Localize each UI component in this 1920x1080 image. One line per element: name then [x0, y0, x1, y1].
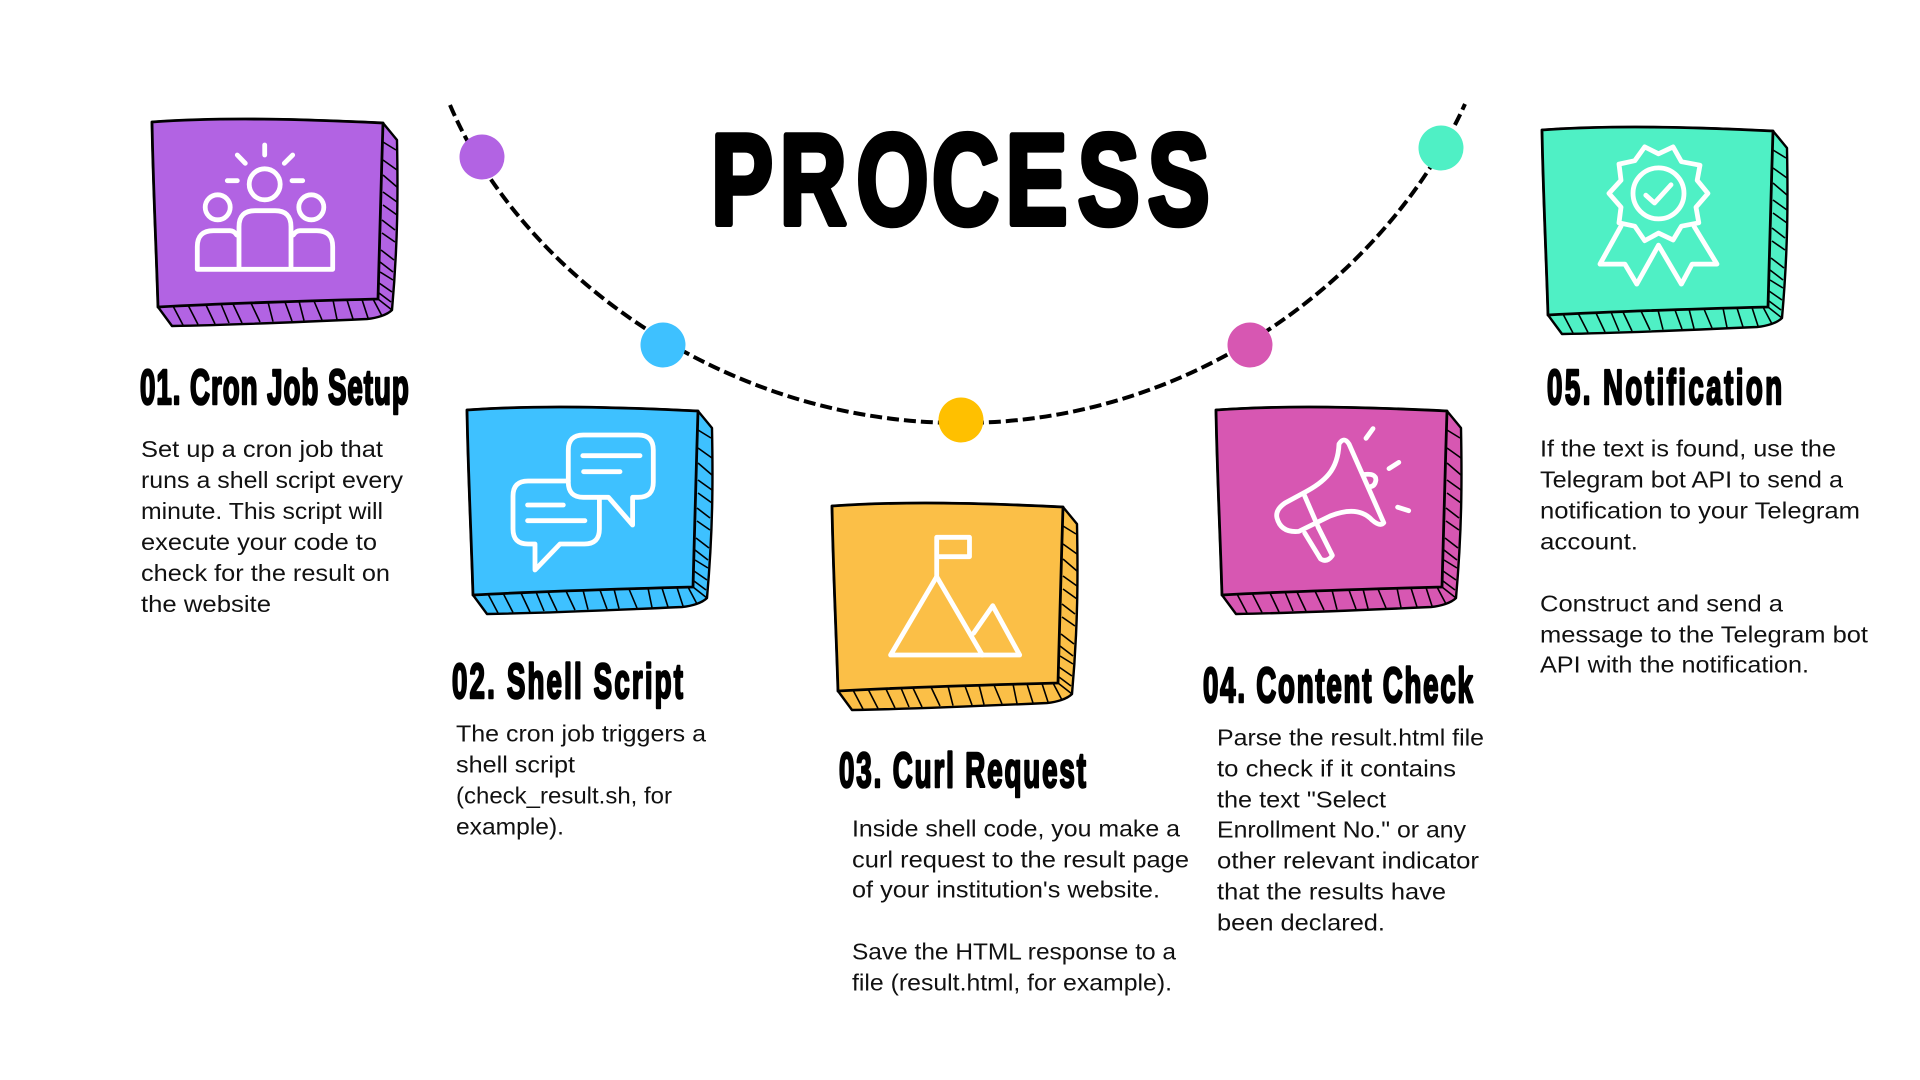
panel: step 4 content check	[1203, 407, 1484, 935]
body text: Save the HTML response to a	[852, 938, 1176, 964]
icon: award badge	[1600, 147, 1717, 284]
heading: 04. Content Check	[1203, 659, 1473, 713]
body text: been declared.	[1217, 909, 1385, 935]
body text: notification to your Telegram	[1540, 497, 1860, 523]
body text: execute your code to	[141, 529, 377, 555]
card: pink	[1216, 407, 1461, 614]
heading: 02. Shell Script	[452, 655, 683, 709]
icon: chat bubbles	[513, 435, 653, 570]
title: PROCESS	[711, 107, 1210, 252]
body text: Inside shell code, you make a	[852, 815, 1180, 841]
body text: to check if it contains	[1217, 755, 1456, 781]
body text: runs a shell script every	[141, 467, 404, 493]
body text: (check_result.sh, for	[456, 782, 672, 808]
body text: example).	[456, 813, 564, 839]
card: teal	[1542, 127, 1787, 334]
body text: other relevant indicator	[1217, 847, 1479, 873]
timeline dot: step 2	[640, 322, 686, 368]
panel: step 3 curl request	[832, 503, 1189, 995]
body text	[1540, 435, 1869, 677]
card: yellow	[832, 503, 1077, 710]
icon: team with sun rays	[197, 145, 333, 269]
icon: mountain with flag	[891, 537, 1020, 655]
body text: of your institution's website.	[852, 876, 1160, 902]
panel: step 1 cron job setup	[140, 119, 409, 617]
card: blue	[467, 407, 712, 614]
card: purple	[152, 119, 397, 326]
heading: 01. Cron Job Setup	[140, 361, 409, 415]
body text: Parse the result.html file	[1217, 724, 1484, 750]
body text: shell script	[456, 751, 576, 777]
body text	[456, 720, 706, 839]
body text: account.	[1540, 528, 1638, 554]
heading: 03. Curl Request	[839, 744, 1086, 798]
icon: megaphone	[1277, 429, 1409, 560]
timeline dot: step 5	[1418, 126, 1464, 170]
body text: the text "Select	[1217, 786, 1387, 812]
body text: The cron job triggers a	[456, 720, 706, 746]
body text: file (result.html, for example).	[852, 969, 1172, 995]
body text: curl request to the result page	[852, 846, 1189, 872]
body text	[141, 436, 404, 617]
timeline dot: step 4	[1228, 322, 1272, 368]
body text: the website	[141, 591, 271, 617]
panel: step 2 shell script	[452, 407, 712, 839]
body text: If the text is found, use the	[1540, 435, 1836, 461]
body text: check for the result on	[141, 560, 390, 586]
body text: Enrollment No." or any	[1217, 816, 1467, 842]
body text: API with the notification.	[1540, 651, 1809, 677]
body text: minute. This script will	[141, 498, 383, 524]
timeline dot: step 3	[938, 398, 984, 442]
body text: message to the Telegram bot	[1540, 621, 1869, 647]
body text: Set up a cron job that	[141, 436, 384, 462]
body text: Telegram bot API to send a	[1540, 466, 1843, 492]
body text: that the results have	[1217, 878, 1446, 904]
dashed curve connector	[450, 104, 1465, 423]
heading: 05. Notification	[1547, 361, 1782, 415]
body text	[852, 815, 1189, 995]
timeline dot: step 1	[460, 134, 504, 180]
panel: step 5 notification	[1540, 127, 1869, 677]
body text	[1217, 724, 1484, 935]
body text: Construct and send a	[1540, 590, 1783, 616]
